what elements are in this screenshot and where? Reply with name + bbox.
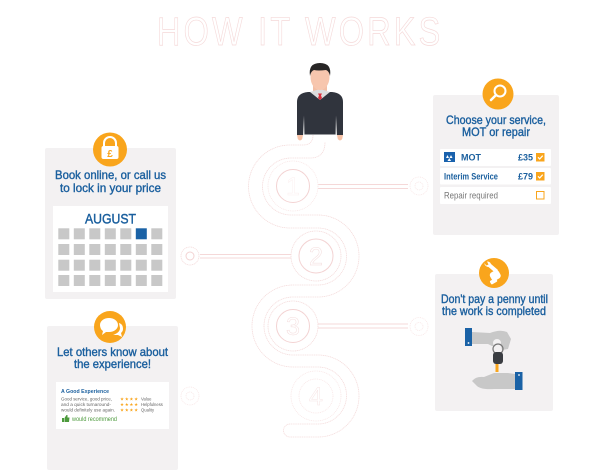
step 3 number: 3	[286, 313, 300, 341]
panel heading: Choose your service,	[446, 113, 546, 127]
review card: ★★★★	[120, 408, 139, 412]
panel: don't pay until completed	[435, 258, 553, 411]
panel heading	[55, 168, 166, 195]
row: repair required	[440, 187, 551, 204]
icon: padlock: £	[107, 149, 113, 160]
step 4 connector dot	[181, 387, 199, 405]
panel: book online	[45, 132, 176, 299]
step 3 connector	[318, 318, 428, 336]
panel heading: Book online, or call us	[55, 168, 166, 182]
title: HOW IT WORKS	[157, 9, 444, 54]
step 4 number: 4	[309, 383, 323, 411]
row: MOT: £35	[518, 152, 533, 162]
step 2 connector	[181, 247, 291, 265]
step 1 number	[268, 161, 318, 211]
panel heading: the work is completed	[442, 304, 546, 318]
icon: hands passing key	[465, 328, 522, 390]
row: MOT	[440, 149, 551, 166]
step 4 number	[291, 371, 341, 421]
icon: speech bubbles	[94, 311, 126, 343]
panel heading	[57, 345, 169, 371]
step 3 number	[268, 301, 318, 351]
review card: would recommend	[71, 417, 117, 423]
review card: Value	[141, 396, 152, 402]
panel heading: to lock in your price	[60, 181, 161, 195]
row: repair required: Repair required	[444, 190, 498, 200]
review card: Quality	[141, 408, 155, 412]
panel heading	[446, 113, 546, 139]
person figure	[297, 63, 343, 140]
calendar: AUGUST	[85, 210, 136, 226]
row: interim service: £79	[518, 172, 533, 182]
review card: would definitely use again.	[61, 408, 115, 412]
panel heading	[441, 292, 548, 318]
step 1 connector	[318, 177, 428, 195]
panel: choose your service	[433, 78, 559, 235]
review card: Good service, good price,	[61, 396, 112, 402]
review card: A Good Experience	[61, 389, 109, 395]
step 2 number: 2	[309, 243, 323, 271]
icon: wrench in hand	[479, 258, 509, 288]
review card: ★★★★	[120, 402, 139, 407]
review card: and a quick turnaround-	[61, 402, 112, 407]
row: interim service	[440, 168, 551, 184]
review card: ★★★★	[120, 396, 139, 402]
winding path with numbered steps	[181, 135, 428, 437]
step 2 number	[291, 231, 341, 281]
review card: Helpfulness	[141, 402, 163, 407]
icon: padlock	[93, 132, 127, 166]
review card	[56, 382, 169, 429]
calendar	[53, 206, 168, 292]
row: interim service: Interim Service	[444, 172, 498, 182]
panel: leave a review	[47, 311, 178, 470]
panel heading: Don't pay a penny until	[441, 292, 548, 306]
step 1 number: 1	[286, 173, 300, 201]
panel heading: Let others know about	[57, 345, 169, 359]
path tube	[249, 135, 359, 437]
icon: magnifier	[482, 78, 514, 110]
panel heading: the experience!	[74, 357, 151, 371]
row: MOT: MOT	[461, 152, 481, 162]
panel heading: MOT or repair	[462, 125, 530, 139]
